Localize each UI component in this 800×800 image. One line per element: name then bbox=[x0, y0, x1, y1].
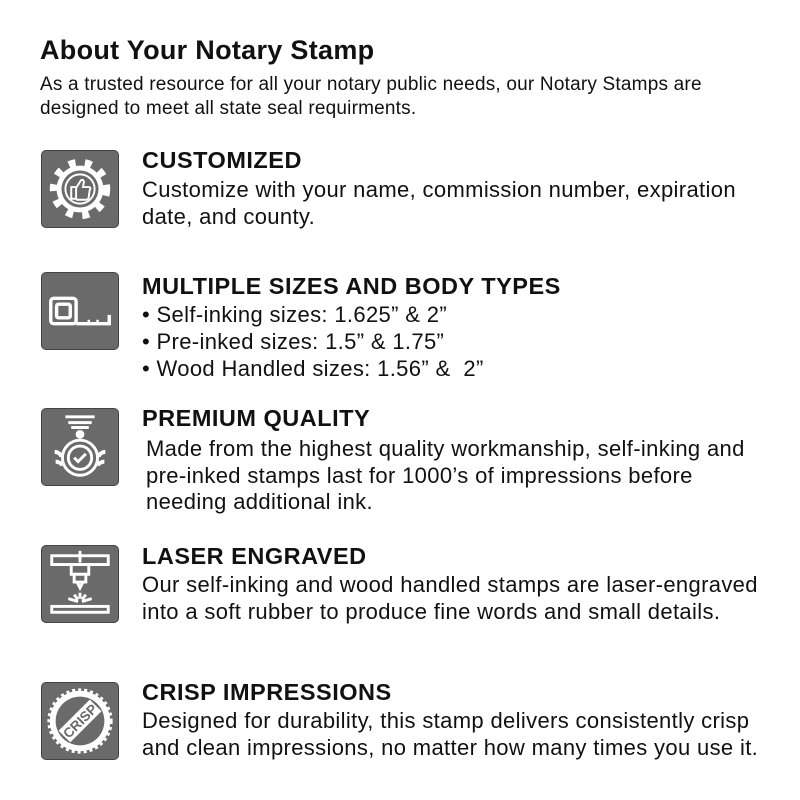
text: laser: Our self-inking and wood handled stamps are laser-engraved bbox=[142, 572, 758, 597]
heading: sizes: MULTIPLE SIZES AND BODY TYPES bbox=[142, 273, 561, 299]
subtitle bbox=[40, 74, 702, 119]
text: crisp: and clean impressions, no matter how many times you use it. bbox=[142, 734, 758, 760]
text: premium: needing additional ink. bbox=[146, 489, 373, 514]
text: sizes list bbox=[142, 302, 484, 381]
heading: laser: LASER ENGRAVED bbox=[142, 543, 367, 569]
subtitle: designed to meet all state seal requirments. bbox=[40, 98, 416, 119]
text: sizes list: • Self-inking sizes: 1.625” & 2” bbox=[142, 302, 447, 327]
heading: premium: PREMIUM QUALITY bbox=[142, 405, 370, 431]
icon: tape measure bbox=[41, 272, 119, 350]
text: customized: Customize with your name, commission number, expiration bbox=[142, 177, 736, 202]
text: sizes list: • Pre-inked sizes: 1.5” & 1.75” bbox=[142, 329, 444, 354]
icon: crisp seal bbox=[41, 682, 119, 760]
title: About Your Notary Stamp bbox=[40, 35, 374, 65]
text: premium: Made from the highest quality workmanship, self-inking and bbox=[146, 436, 745, 461]
icon: medal bbox=[41, 408, 119, 486]
text: premium bbox=[146, 436, 745, 514]
text: crisp: Designed for durability, this stamp delivers consistently crisp bbox=[142, 708, 749, 733]
icon: gear thumbs up bbox=[41, 150, 119, 228]
text: premium: pre-inked stamps last for 1000’s of impressions before bbox=[146, 462, 693, 488]
text: customized bbox=[142, 177, 736, 228]
text: customized: date, and county. bbox=[142, 204, 315, 228]
heading: crisp: CRISP IMPRESSIONS bbox=[142, 679, 392, 705]
heading: customized: CUSTOMIZED bbox=[142, 147, 302, 173]
text: laser bbox=[142, 572, 758, 624]
text: laser: into a soft rubber to produce fine words and small details. bbox=[142, 598, 720, 624]
subtitle: As a trusted resource for all your notary public needs, our Notary Stamps are bbox=[40, 74, 702, 95]
icon: crisp seal: CRISP bbox=[60, 701, 100, 741]
icon: laser engraver bbox=[41, 545, 119, 623]
text: crisp bbox=[142, 708, 758, 760]
text: sizes list: • Wood Handled sizes: 1.56” & 2” bbox=[142, 356, 484, 381]
